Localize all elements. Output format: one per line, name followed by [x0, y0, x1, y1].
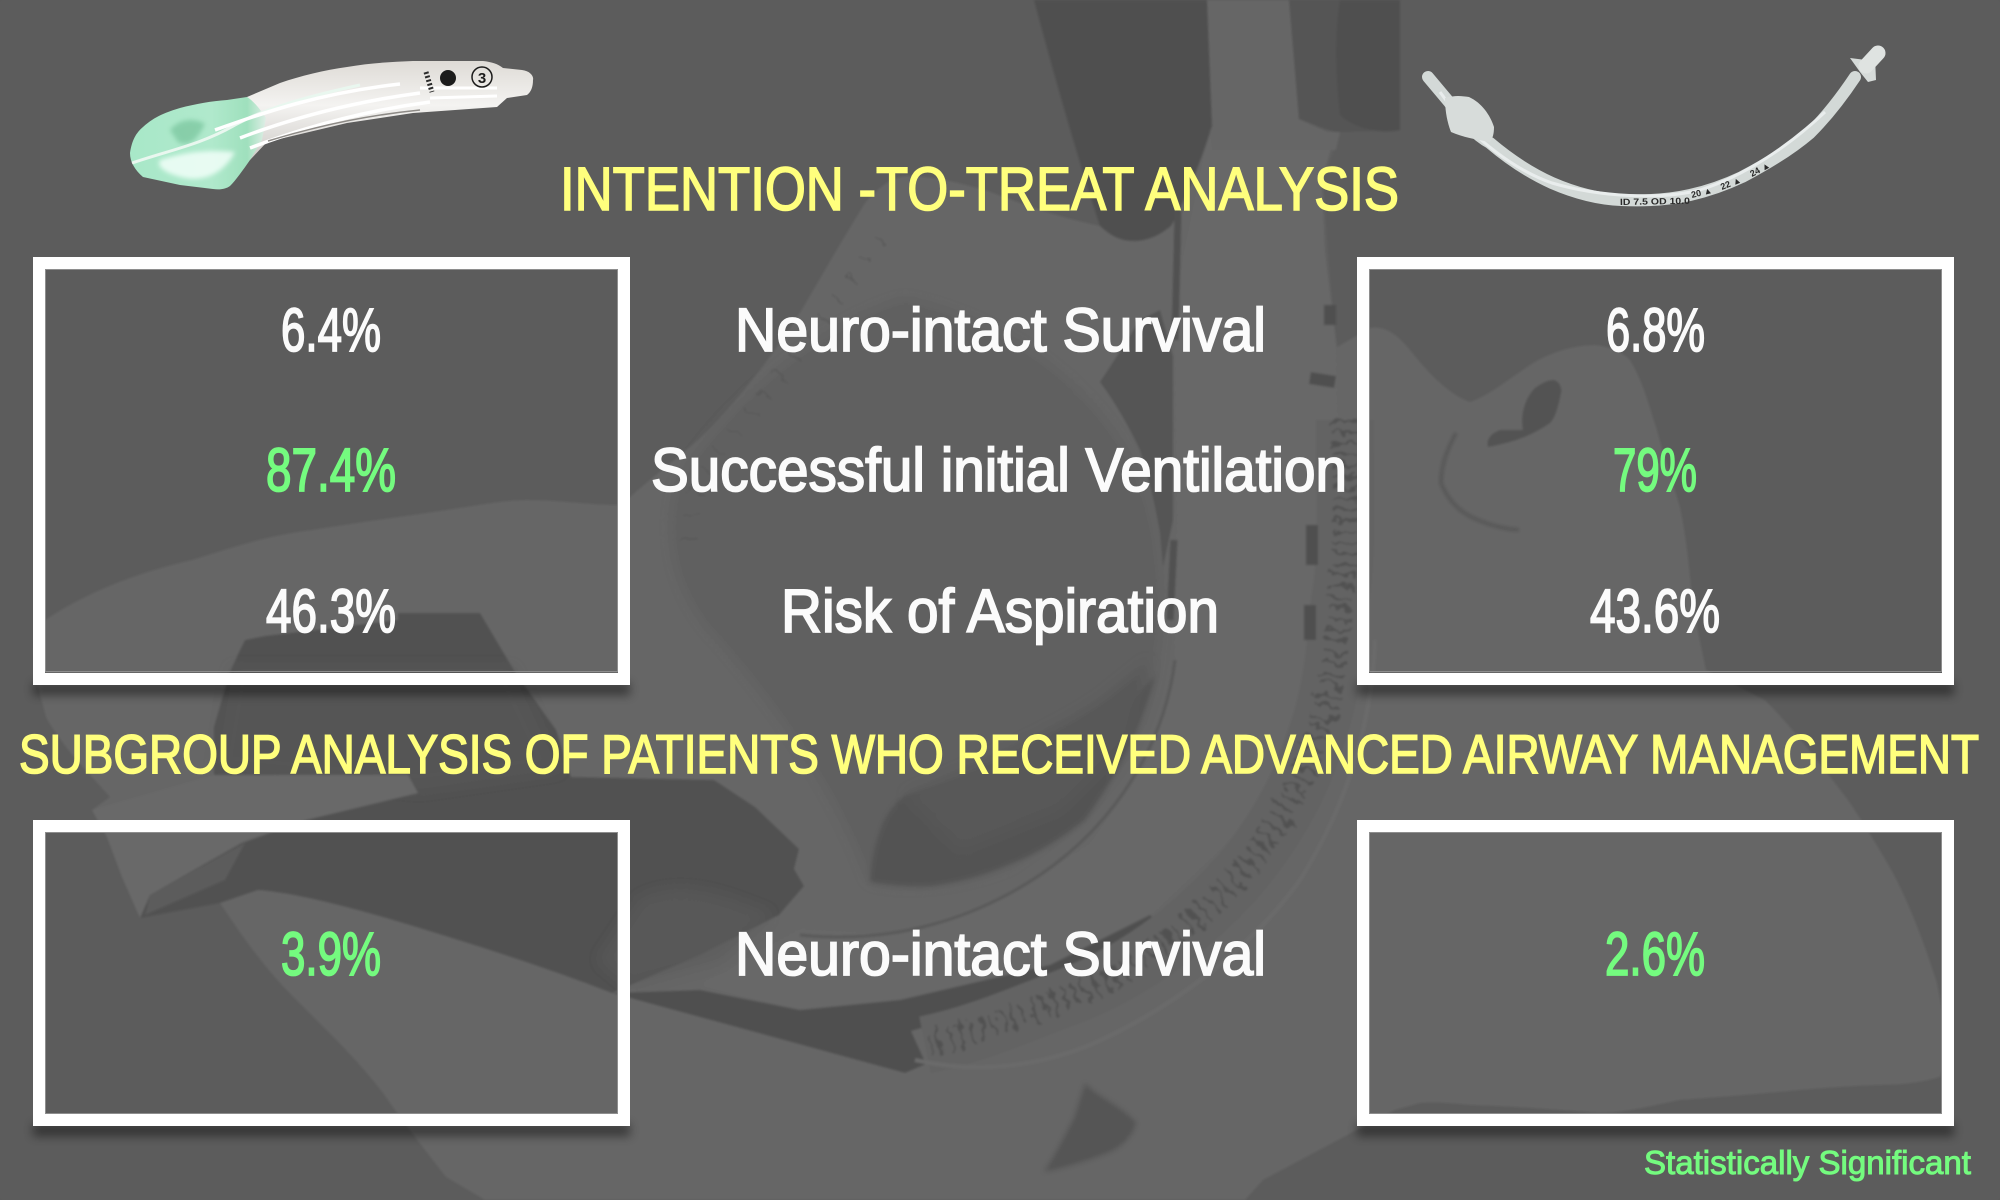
label: subgroup neuro-intact survival: Neuro-intact Survival: [735, 920, 1266, 988]
label: risk of aspiration: Risk of Aspiration: [781, 577, 1219, 645]
nose crease: [1441, 433, 1519, 530]
textured band: [925, 420, 1346, 1045]
dark oropharynx shadow: [870, 674, 1156, 886]
top dark throat: [1034, 0, 1212, 241]
icon: endotracheal tube: 24 ▲: [1748, 160, 1772, 179]
dark wedge by tube: [1100, 310, 1173, 567]
teeth and mouth cavity: [140, 613, 804, 993]
icon: endotracheal tube: 22 ▲: [1719, 175, 1743, 192]
panel: endotracheal tube intention-to-treat results: [1357, 263, 1954, 695]
value: neuro-intact survival, endotracheal tube: 6.8%: [1606, 296, 1705, 364]
value: subgroup neuro-intact survival, endotracheal tube: 2.6%: [1605, 920, 1705, 988]
icon: endotracheal tube: 20 ▲: [1690, 185, 1713, 200]
heading: intention-to-treat analysis: INTENTION -TO-TREAT ANALYSIS: [560, 155, 1399, 223]
nostril: [1488, 380, 1561, 447]
label: successful initial ventilation: Successful initial Ventilation: [651, 436, 1347, 504]
legend: statistically significant: Statistically Significant: [1644, 1144, 1971, 1181]
tube inner curve edge: [800, 660, 1175, 937]
lip highlight near value: [244, 613, 398, 640]
value: subgroup neuro-intact survival, laryngeal mask: 3.9%: [281, 920, 381, 988]
icon: endotracheal tube: ID 7.5 OD 10.0: [1620, 196, 1690, 207]
icon: laryngeal mask airway device: 3: [478, 70, 486, 87]
tube markings: [1170, 210, 1178, 620]
tongue: [672, 300, 1160, 885]
panel: endotracheal tube subgroup result: [1357, 826, 1954, 1136]
icon: laryngeal mask airway device: [130, 61, 533, 189]
panel: laryngeal mask subgroup result: [33, 826, 630, 1136]
upper light: tube body slightly brighter: [700, 130, 1340, 1010]
dark line outside tube curve: [957, 666, 1314, 1006]
dark wedge under tube end: [612, 915, 1161, 1073]
value: risk of aspiration, endotracheal tube: 43.6%: [1590, 577, 1720, 645]
icon: endotracheal tube: [1428, 53, 1878, 207]
throat notch: [1044, 1083, 1136, 1172]
value: successful initial ventilation, endotracheal tube: 79%: [1613, 436, 1697, 504]
label: neuro-intact survival: Neuro-intact Survival: [735, 296, 1266, 364]
panel: laryngeal mask intention-to-treat results: [33, 263, 630, 695]
value: neuro-intact survival, laryngeal mask: 6.4%: [281, 296, 381, 364]
value: successful initial ventilation, laryngeal mask: 87.4%: [266, 436, 396, 504]
value: risk of aspiration, laryngeal mask: 46.3%: [266, 577, 396, 645]
mottled specks along tongue edge: [687, 240, 880, 560]
